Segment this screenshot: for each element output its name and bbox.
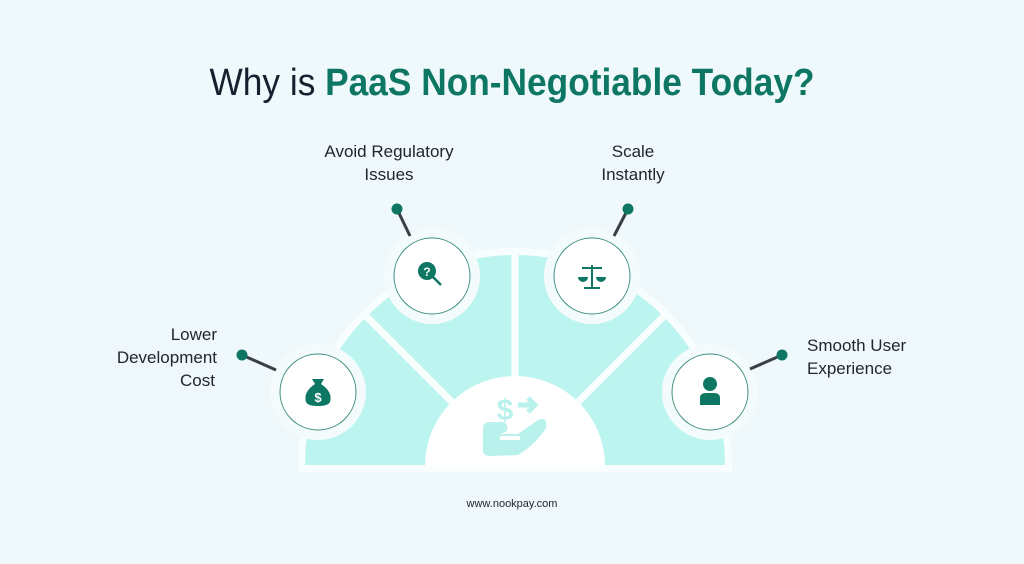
- icon: scales: [578, 265, 606, 288]
- label: scale instantly: Scale: [612, 142, 654, 161]
- circle: lower development cost: [270, 344, 366, 440]
- icon: hand with dollar: [483, 394, 546, 456]
- label: lower development cost: [117, 325, 217, 390]
- circle: scale instantly: [544, 228, 640, 324]
- semicircle diagram: [298, 248, 732, 472]
- label: avoid regulatory issues: [324, 142, 454, 184]
- label: smooth user experience: Smooth User: [807, 336, 907, 355]
- label: smooth user experience: [807, 336, 907, 378]
- icon: user: [700, 377, 720, 405]
- circle: smooth user experience: [662, 344, 758, 440]
- circle: avoid regulatory issues: [384, 228, 480, 324]
- label: scale instantly: Instantly: [601, 165, 665, 184]
- footer url: www.nookpay.com: [466, 498, 557, 510]
- title: Why is PaaS Non-Negotiable Today?: [210, 62, 814, 104]
- label: avoid regulatory issues: Avoid Regulatory: [324, 142, 454, 161]
- label: avoid regulatory issues: Issues: [364, 165, 414, 184]
- label: lower development cost: Cost: [180, 371, 215, 390]
- connector: smooth user: [750, 350, 788, 369]
- icon: search question: ?: [423, 265, 431, 279]
- label: scale instantly: [601, 142, 665, 184]
- icon: hand with dollar: $: [497, 394, 514, 427]
- connector: avoid regulatory: [392, 204, 410, 236]
- icon: money bag: $: [314, 390, 322, 405]
- connector: scale instantly: [614, 204, 634, 236]
- label: lower development cost: Lower: [171, 325, 217, 344]
- connector: lower development cost: [236, 350, 276, 370]
- label: smooth user experience: Experience: [807, 359, 892, 378]
- label: lower development cost: Development: [117, 348, 217, 367]
